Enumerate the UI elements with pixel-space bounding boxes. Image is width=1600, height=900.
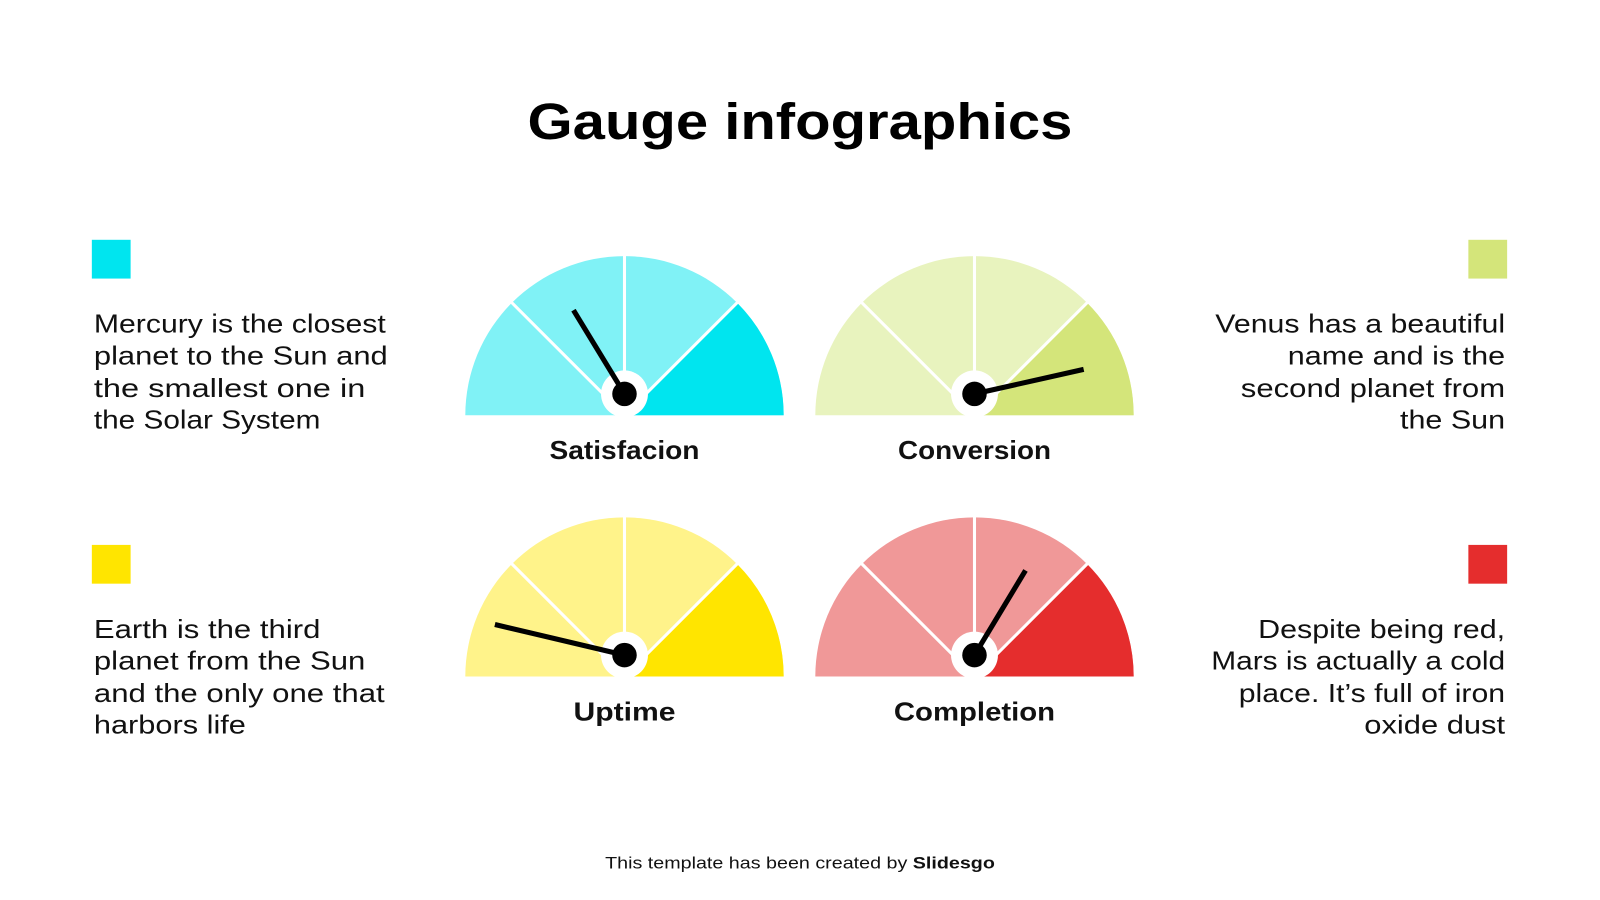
icon: green square — [1468, 240, 1507, 279]
icon: yellow square — [92, 545, 131, 584]
panel: mars — [1211, 545, 1507, 740]
text block: venus: the Sun — [1400, 405, 1505, 435]
text block: mercury: planet to the Sun and — [94, 340, 388, 370]
gauge: conversion: Conversion — [898, 437, 1051, 465]
gauge: completion — [815, 516, 1134, 726]
text block: earth: harbors life — [94, 710, 246, 740]
text block: venus: second planet from — [1241, 373, 1505, 403]
text block: venus: Venus has a beautiful — [1215, 309, 1505, 339]
footer: This template has been created by Slidesgo — [605, 853, 995, 872]
panel: mercury — [92, 240, 388, 435]
panel: earth — [92, 545, 386, 740]
gauge: completion: Completion — [894, 698, 1055, 726]
text block: earth: and the only one that — [94, 678, 386, 708]
title: Gauge infographics — [528, 93, 1072, 150]
text block: mars: Mars is actually a cold — [1211, 645, 1505, 675]
gauge: conversion — [815, 255, 1134, 465]
text block: mercury — [94, 309, 388, 435]
icon: red square — [1468, 545, 1507, 584]
gauge: satisfaction — [465, 255, 784, 465]
text block: mercury: Mercury is the closest — [94, 309, 387, 339]
text block: mars: place. It’s full of iron — [1239, 678, 1505, 708]
text block: mercury: the smallest one in — [94, 373, 365, 403]
panel: venus — [1215, 240, 1507, 435]
text block: venus — [1215, 309, 1505, 435]
text block: mars: Despite being red, — [1258, 614, 1505, 644]
gauge: satisfaction: Satisfacion — [549, 437, 699, 465]
text block: mercury: the Solar System — [94, 405, 320, 435]
text block: earth — [94, 614, 386, 740]
text block: mars: oxide dust — [1364, 710, 1506, 740]
text block: earth: Earth is the third — [94, 614, 320, 644]
icon: cyan square — [92, 240, 131, 279]
text block: mars — [1211, 614, 1506, 740]
gauge: uptime — [465, 516, 784, 726]
gauge: uptime: Uptime — [573, 698, 676, 726]
text block: venus: name and is the — [1288, 340, 1505, 370]
text block: earth: planet from the Sun — [94, 645, 365, 675]
